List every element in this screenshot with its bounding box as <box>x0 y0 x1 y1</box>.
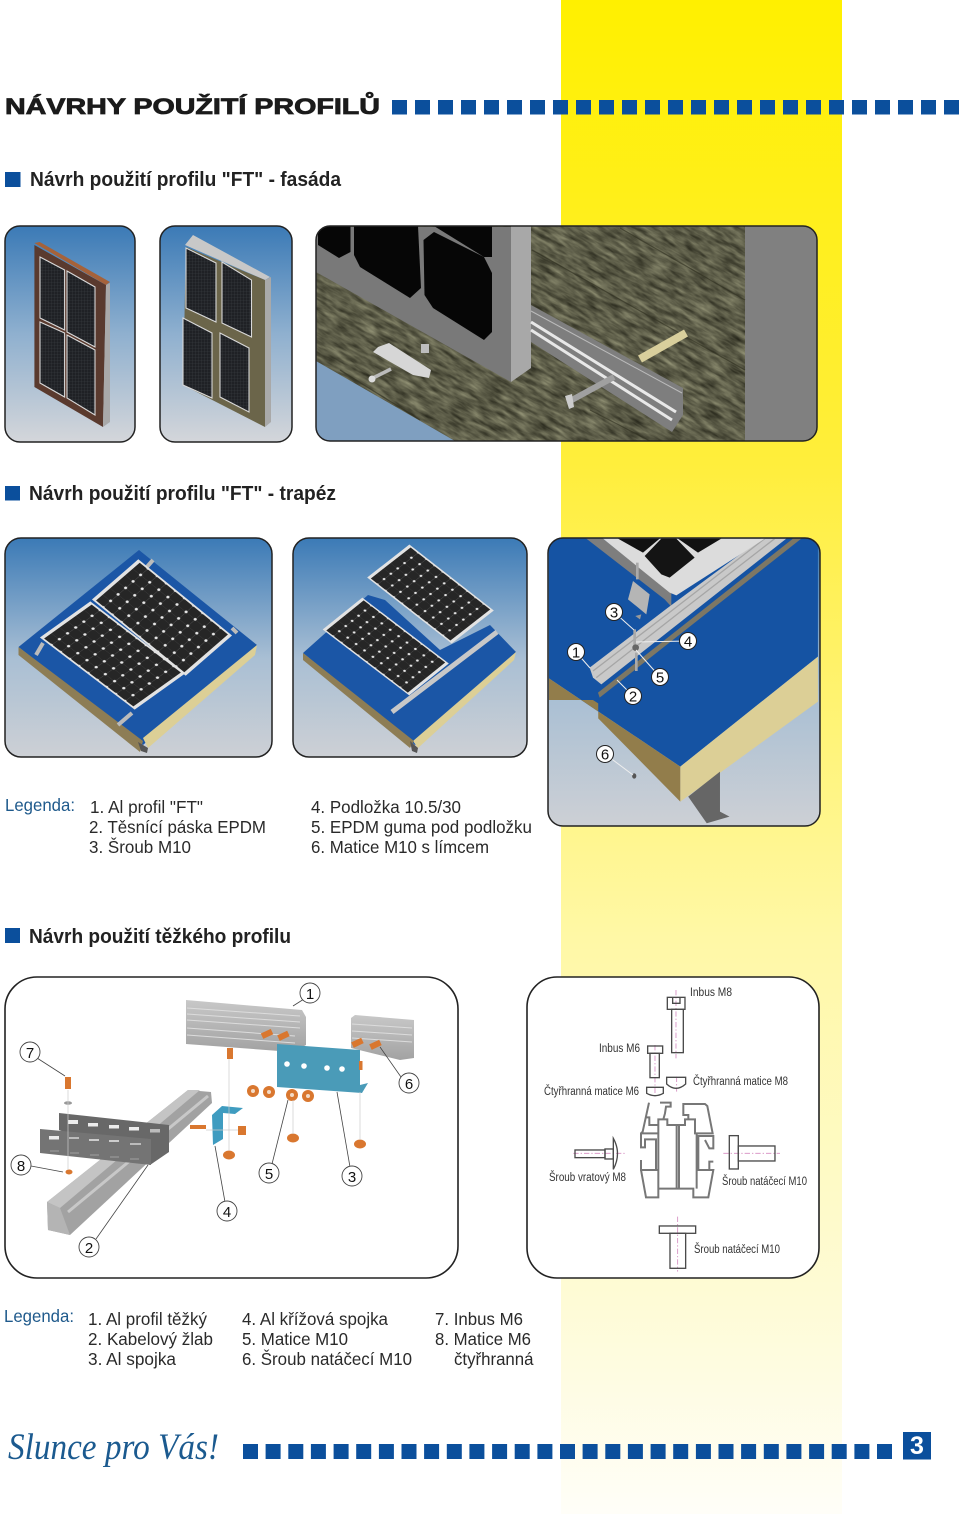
callout 2: 2 <box>85 1240 93 1257</box>
legend: FT profile: Legenda: <box>5 795 75 815</box>
section heading: facade: Návrh použití profilu "FT" - fasáda <box>30 169 342 191</box>
legend: heavy profile: 1. Al profil těžký <box>88 1309 207 1329</box>
cable tray <box>40 1113 169 1165</box>
callout 5: 5 <box>265 1166 273 1183</box>
legend: FT profile: 5. EPDM guma pod podložku <box>311 817 532 837</box>
legend: FT profile <box>5 795 532 857</box>
legend: heavy profile: 4. Al křížová spojka <box>242 1309 388 1329</box>
callout 7 <box>20 1042 40 1062</box>
slogan: Slunce pro Vás! <box>8 1427 219 1468</box>
footer square row <box>243 1444 892 1459</box>
callout 2 <box>79 1237 99 1257</box>
callout 7: 7 <box>26 1045 34 1062</box>
panel: heavy profile exploded view <box>5 977 458 1278</box>
carriage bolt M8 <box>575 1138 617 1169</box>
panel: facade overview, stone wall <box>160 226 292 442</box>
legend: heavy profile: Legenda: <box>4 1306 74 1326</box>
callout 6 <box>399 1073 419 1093</box>
mounting rail <box>531 305 683 432</box>
legend: FT profile: 1. Al profil "FT" <box>90 797 203 817</box>
legend: heavy profile: čtyřhranná <box>454 1349 534 1369</box>
legend: heavy profile: 3. Al spojka <box>88 1349 176 1369</box>
rotating bolt M10 bottom <box>659 1226 696 1268</box>
callout 6 <box>596 746 614 764</box>
blue spojka <box>277 1044 368 1093</box>
legend: FT profile: 6. Matice M10 s límcem <box>311 837 489 857</box>
fasteners <box>573 990 780 1272</box>
legend: FT profile: 4. Podložka 10.5/30 <box>311 797 461 817</box>
callout 5 <box>652 668 668 686</box>
callout 1 <box>300 983 320 1003</box>
callout 1: 1 <box>572 644 580 662</box>
callout 1 <box>568 644 584 662</box>
callout 4: 4 <box>223 1204 231 1221</box>
panel: roof with two adjacent modules <box>5 538 272 757</box>
callout 8 <box>11 1155 31 1175</box>
square nut M6 <box>647 1087 663 1096</box>
part labels: Inbus M6 <box>599 1043 640 1055</box>
title: NÁVRHY POUŽITÍ PROFILŮ <box>5 91 380 119</box>
callout 1: 1 <box>306 986 314 1003</box>
part labels: Šroub vratový M8 <box>549 1171 626 1184</box>
callout 4 <box>217 1201 237 1221</box>
panel: roof with separated modules <box>293 538 527 757</box>
orange bolts and nuts <box>64 1029 382 1174</box>
callout 3 <box>606 604 622 622</box>
callout 3: 3 <box>610 604 618 622</box>
callout 8: 8 <box>17 1158 25 1175</box>
legend: heavy profile <box>4 1306 534 1369</box>
dowel <box>640 333 686 359</box>
panel: facade overview, brown wall <box>5 226 135 442</box>
part labels <box>544 987 807 1256</box>
module, rail and fasteners <box>586 539 801 698</box>
legend: heavy profile: 7. Inbus M6 <box>435 1309 523 1329</box>
part labels: Čtyřhranná matice M6 <box>544 1085 639 1098</box>
part labels: Šroub natáčecí M10 <box>722 1175 807 1188</box>
part labels: Šroub natáčecí M10 <box>694 1243 780 1256</box>
section heading: heavy profile: Návrh použití těžkého profilu <box>29 926 291 948</box>
title square row <box>392 100 959 114</box>
section heading: trapez: Návrh použití profilu "FT" - trapéz <box>29 483 336 505</box>
legend: FT profile: 2. Těsnící páska EPDM <box>89 817 266 837</box>
callout 5: 5 <box>656 670 664 686</box>
bracket <box>368 343 431 382</box>
callout 6: 6 <box>405 1076 413 1093</box>
part labels: Inbus M8 <box>690 987 732 999</box>
callout 3 <box>342 1166 362 1186</box>
legend: heavy profile: 8. Matice M6 <box>435 1329 531 1349</box>
callout 2: 2 <box>629 688 637 706</box>
inbus M6 <box>648 1046 663 1078</box>
page number: 3 <box>910 1432 924 1460</box>
solar cells <box>318 226 492 340</box>
part labels: Čtyřhranná matice M8 <box>693 1075 788 1088</box>
aluminium profile <box>640 1103 713 1197</box>
legend: heavy profile: 2. Kabelový žlab <box>88 1329 213 1349</box>
callout 4 <box>680 632 696 650</box>
page number <box>903 1432 931 1460</box>
inbus M8 <box>667 997 685 1053</box>
rotating bolt M10 right <box>729 1136 775 1169</box>
callout 4: 4 <box>684 634 692 650</box>
screw <box>565 377 614 409</box>
legend: FT profile: 3. Šroub M10 <box>89 836 191 857</box>
callout 6: 6 <box>601 746 609 764</box>
callout 2 <box>624 688 642 706</box>
panel: trapez roof detail with numbered parts <box>548 537 820 826</box>
legend: heavy profile: 6. Šroub natáčecí M10 <box>242 1348 412 1369</box>
blue angle bracket <box>212 1106 243 1145</box>
panel: facade detail <box>315 225 818 442</box>
upper rail <box>186 1000 414 1060</box>
callout 5 <box>259 1163 279 1183</box>
solar module frame <box>316 227 511 382</box>
lower rail <box>47 1090 212 1235</box>
panel: heavy profile cross-section drawing <box>527 977 819 1278</box>
legend: heavy profile: 5. Matice M10 <box>242 1329 348 1349</box>
yellow background band <box>561 0 842 1514</box>
square nut M8 <box>667 1077 686 1088</box>
callout 3: 3 <box>348 1169 356 1186</box>
